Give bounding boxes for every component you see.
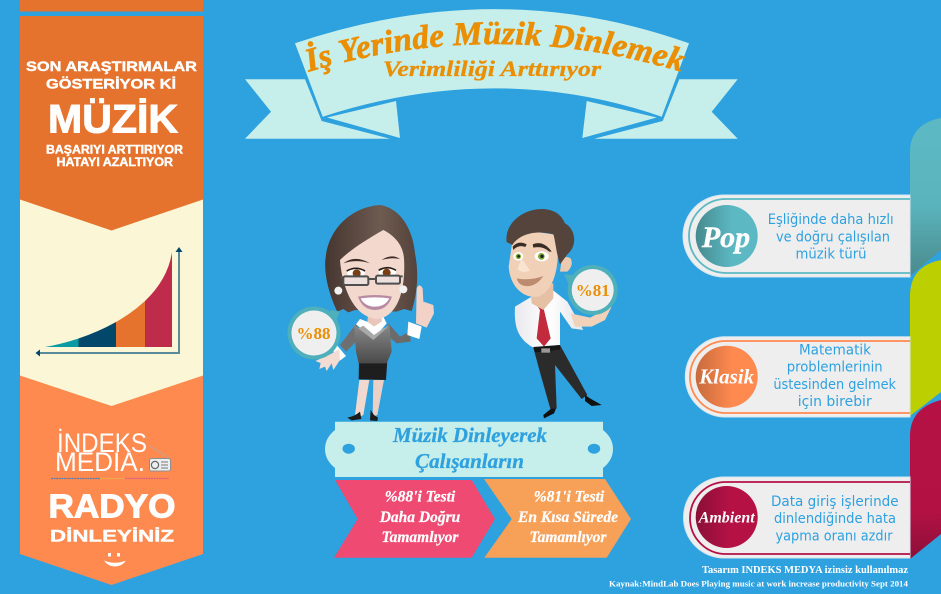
speech bubble: %81 [564,265,618,315]
arrow: %81 en kısa sürede: Tamamlıyor [530,529,607,546]
logo: indeks media [51,427,170,478]
klasik description: üstesinden gelmek [773,377,897,393]
speech bubble: %81: %81 [576,281,610,300]
subheading: başarıyı arttırıyor: BAŞARIYI ARTTIRIYOR [46,144,184,156]
character: woman [288,205,434,421]
panel: ambient [684,477,910,558]
logo: indeks media: MEDIA. [55,447,145,477]
pop description: ve doğru çalışılan [776,230,890,246]
arrow: %81 en kısa sürede: En Kısa Sürede [517,509,618,526]
footer credits: Tasarım INDEKS MEDYA izinsiz kullanılmaz [702,565,909,576]
icon: klasik circle [696,346,758,408]
arrow: %81 en kısa sürede [484,479,631,558]
heading: radyo dinleyiniz: DİNLEYİNİZ [50,526,174,545]
panel: left banner [20,0,203,585]
klasik description: için birebir [798,394,872,410]
orange header ribbon [20,16,203,230]
ambient description: yapma oranı azdır [776,529,893,545]
ambient description: dinlendiğinde hata [774,511,896,527]
panel: pop [683,195,910,277]
pop description [768,212,894,262]
arrow: %88 daha doğru: Tamamlıyor [382,529,459,546]
heading: müzik: MÜZİK [48,96,178,141]
icon: pop circle [696,205,758,267]
footer credits [609,565,909,589]
ambient description: Data giriş işlerinde [771,494,899,510]
heading: son araştırmalar: GÖSTERİYOR Kİ [46,76,176,92]
ribbon tails [245,79,738,139]
footer credits: Kaynak:MindLab Does Playing music at work increase productivity Sept 2014 [609,579,909,589]
icon: klasik circle: Klasik [698,364,755,388]
arrow: %88 daha doğru: Daha Doğru [379,509,461,526]
heading: radyo dinleyiniz [48,487,176,545]
logo: indeks media: İNDEKS [57,427,147,458]
subtitle text: Verimliliği Arttırıyor [383,56,602,81]
speech bubble: %88: %88 [296,324,330,343]
icon: smile [104,553,126,566]
heading: radyo dinleyiniz: RADYO [48,487,176,524]
icon: pop circle: Pop [701,221,750,254]
arrow: %88 daha doğru [334,480,495,558]
top strip [20,0,203,12]
icon: ambient circle [696,486,758,548]
pop description: Eşliğinde daha hızlı [768,212,894,228]
plaque: müzik dinleyerek çalışanların [325,422,613,477]
ribbon main arc [295,9,689,117]
speech bubble: %88 [288,306,340,360]
subheading: başarıyı arttırıyor [46,144,184,169]
chart: rising area curve [36,247,182,356]
klasik description: problemlerinin [787,360,883,376]
klasik description: Matematik [799,342,872,358]
arrow: %81 en kısa sürede: %81'i Testi [534,488,605,506]
heading: son araştırmalar: SON ARAŞTIRMALAR [26,58,197,74]
icon: ambient circle: Ambient [698,510,755,526]
heading: son araştırmalar [26,58,197,92]
klasik description [773,342,897,410]
title text: İş Yerinde Müzik Dinlemek [306,21,686,74]
title ribbon [245,9,738,139]
arrow: %88 daha doğru: %88'i Testi [385,488,456,506]
character: man [506,209,618,418]
pop description: müzik türü [796,246,866,262]
cream chart section [20,195,203,410]
subheading: başarıyı arttırıyor: HATAYI AZALTIYOR [56,157,174,169]
panel: klasik [685,337,910,417]
ambient description [771,494,899,545]
plaque: müzik dinleyerek çalışanların: Müzik Dinleyerek [392,423,547,447]
right side tabs [910,118,941,559]
light orange footer ribbon [20,376,203,585]
plaque: müzik dinleyerek çalışanların: Çalışanların [415,449,524,473]
